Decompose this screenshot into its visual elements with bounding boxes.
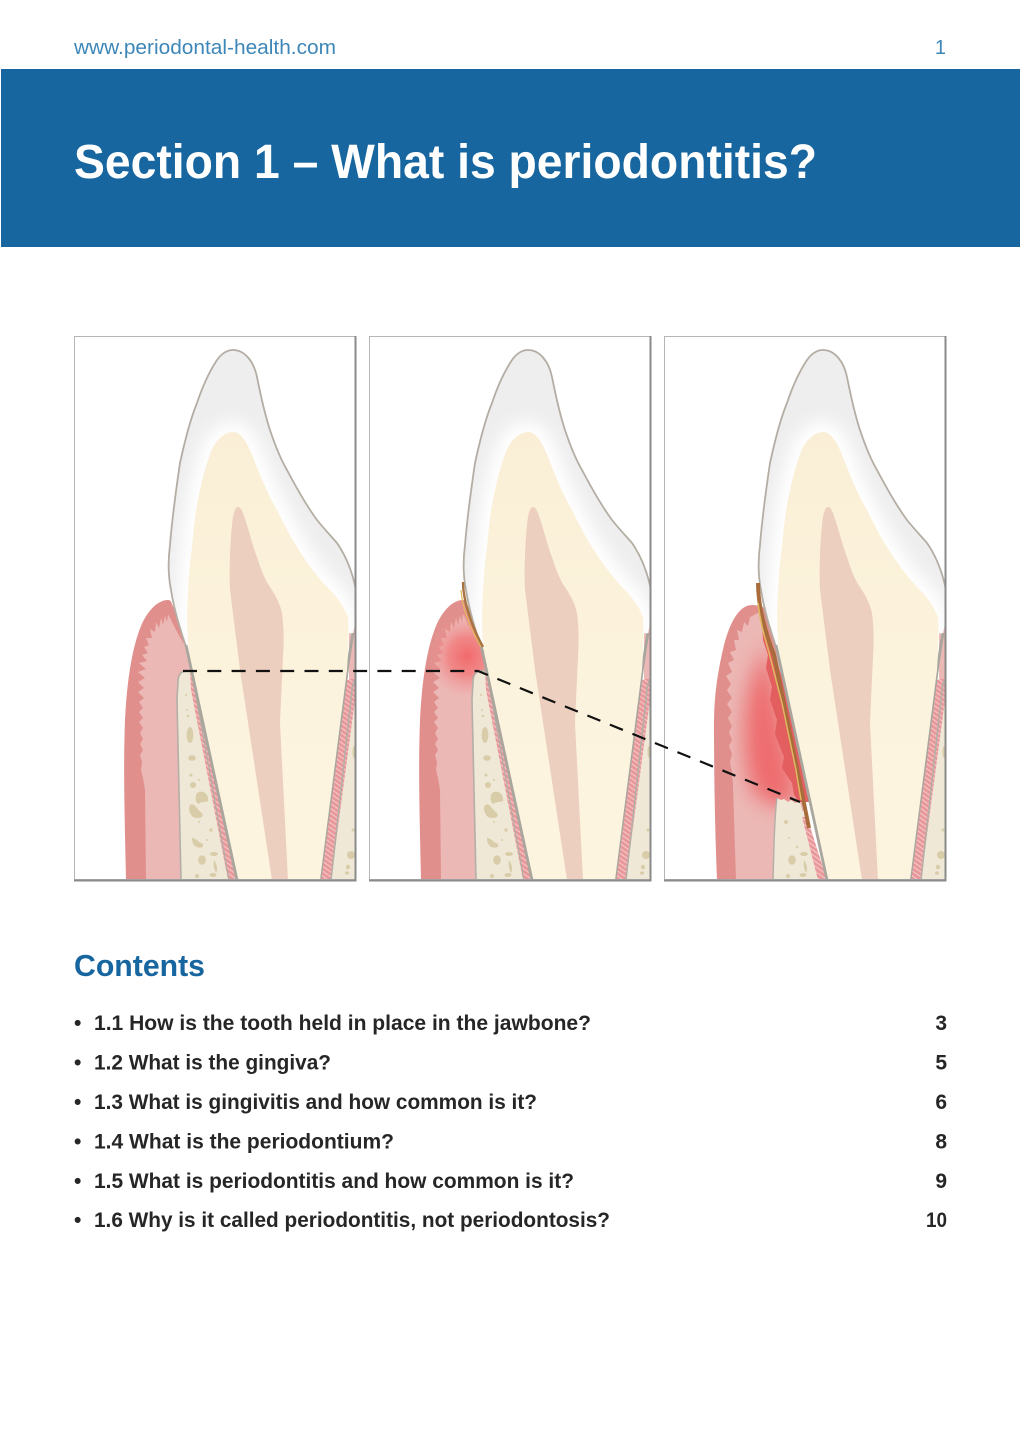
item 1.2: • (74, 1052, 81, 1074)
item 1.6 (74, 1209, 947, 1232)
periodontitis gum (714, 605, 812, 880)
item 1.2: 5 (935, 1052, 947, 1074)
item 1.5: 1.5 What is periodontitis and how common is it? (94, 1170, 574, 1193)
gingivitis tooth (464, 350, 653, 880)
item 1.3: • (74, 1091, 81, 1114)
plaque at gum margin (461, 582, 483, 647)
item 1.4: 1.4 What is the periodontium? (94, 1130, 394, 1154)
item 1.4: 8 (935, 1130, 947, 1154)
periodontitis bone (773, 798, 827, 880)
item 1.1 (74, 1012, 947, 1035)
item 1.3: 1.3 What is gingivitis and how common is it? (94, 1091, 537, 1114)
panel: gingivitis tooth (369, 336, 653, 880)
panel: periodontitis tooth (664, 336, 948, 880)
item 1.2 (74, 1052, 947, 1074)
page header link: www.periodontal-health.com (73, 37, 336, 59)
healthy bone (177, 671, 238, 880)
contents list (74, 1012, 947, 1232)
item 1.3: 6 (935, 1091, 947, 1114)
item 1.1: 3 (935, 1012, 947, 1035)
item 1.1: • (74, 1012, 81, 1035)
item 1.5 (74, 1170, 947, 1193)
item 1.5: 9 (935, 1170, 947, 1193)
item 1.2: 1.2 What is the gingiva? (94, 1052, 331, 1074)
page number: 1 (935, 37, 946, 59)
healthy gum (124, 600, 200, 880)
healthy tooth (169, 350, 358, 880)
periodontitis tooth (759, 350, 948, 880)
panel: healthy tooth (74, 336, 358, 880)
calculus along the root (758, 583, 809, 828)
item 1.6: • (74, 1209, 81, 1232)
item 1.4: • (74, 1130, 81, 1154)
item 1.6: 1.6 Why is it called periodontitis, not periodontosis? (94, 1209, 610, 1232)
title banner: Section 1 – What is periodontitis? (74, 136, 817, 189)
item 1.5: • (74, 1170, 81, 1193)
item 1.1: 1.1 How is the tooth held in place in the jawbone? (94, 1012, 591, 1035)
heading: contents: Contents (74, 948, 205, 983)
title banner (1, 69, 1020, 247)
item 1.3 (74, 1091, 947, 1114)
gingivitis bone (472, 671, 533, 880)
item 1.4 (74, 1130, 947, 1154)
gingivitis gum (419, 600, 490, 879)
dashed bone-level line (183, 671, 800, 802)
item 1.6: 10 (926, 1209, 947, 1232)
